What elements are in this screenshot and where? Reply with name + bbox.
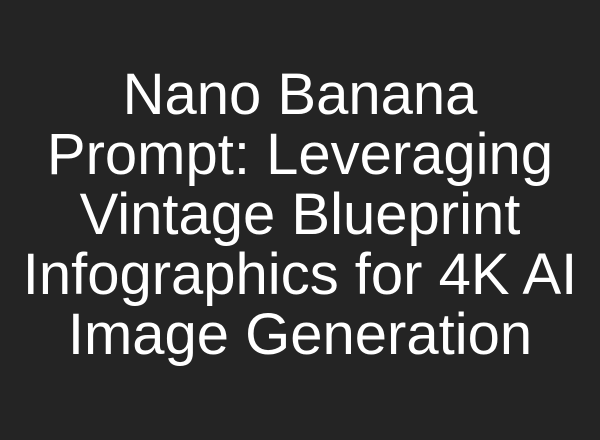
title [23,62,577,367]
title: Prompt: Leveraging [47,122,553,187]
title: Vintage Blueprint [80,182,520,247]
title: Nano Banana [123,62,477,127]
title: Image Generation [68,302,532,367]
title: Infographics for 4K AI [23,242,577,307]
